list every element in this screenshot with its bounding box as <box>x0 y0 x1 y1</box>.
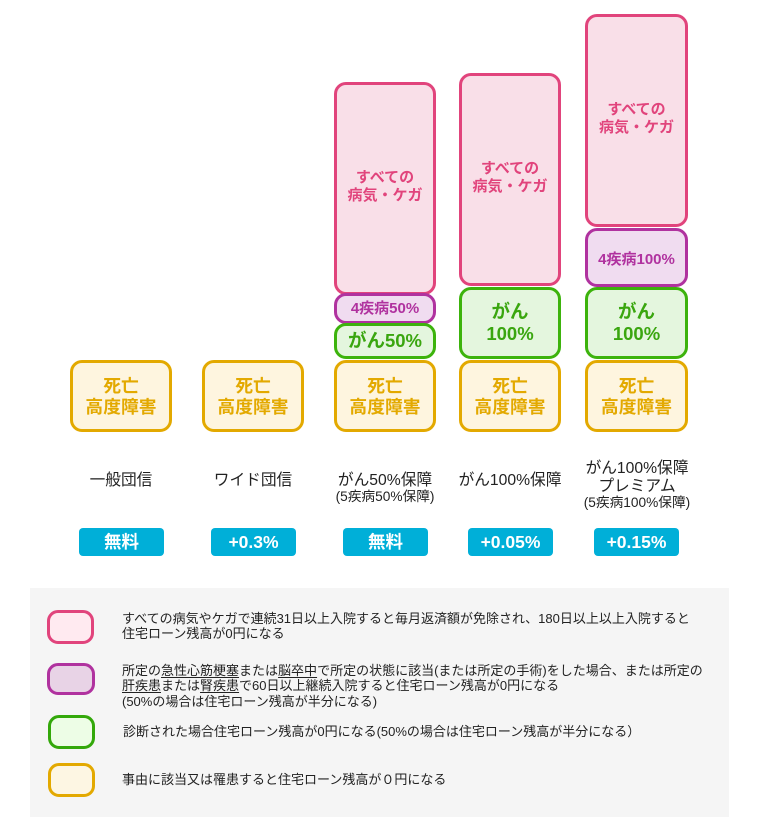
green box: 100% <box>486 323 534 344</box>
yellow box <box>585 360 688 432</box>
green box: 100% <box>613 323 660 344</box>
plan name: がん100%保障プレミアム: (5疾病100%保障) <box>584 495 690 510</box>
price badge: +0.15%: +0.15% <box>607 532 666 552</box>
plan name: がん100%保障プレミアム: プレミアム <box>598 478 676 495</box>
price badge: 無料 <box>79 528 164 556</box>
yellow box <box>459 360 561 432</box>
plan name: 一般団信: 一般団信 <box>90 472 152 489</box>
legend background <box>30 588 729 817</box>
purple box: 4疾病50% <box>351 300 419 317</box>
pink box: 病気・ケガ <box>347 186 422 204</box>
price badge: 無料: 無料 <box>368 532 403 552</box>
price badge: +0.3% <box>211 528 296 556</box>
column: がん100%保障 stack <box>459 73 561 432</box>
yellow box: 死亡 <box>367 376 403 396</box>
column: がん100%保障プレミアム stack <box>585 14 688 432</box>
plan name: がん50%保障 <box>336 471 434 504</box>
green box: がん50% <box>348 330 422 351</box>
column: ワイド団信 death box: 死亡 <box>235 376 271 396</box>
legend text: pink <box>122 611 690 641</box>
pink box <box>459 73 561 286</box>
price badge: +0.05%: +0.05% <box>481 532 540 552</box>
legend text: purple: 肝疾患または腎疾患で60日以上継続入院すると住宅ローン残高が0円になる <box>122 678 559 693</box>
price badge: +0.05% <box>468 528 553 556</box>
yellow box: 高度障害 <box>601 397 672 417</box>
column: がん50%保障 stack <box>334 82 436 432</box>
column: 一般団信 death box: 高度障害 <box>85 397 157 417</box>
pink box: 病気・ケガ <box>472 178 548 194</box>
purple box: 4疾病100% <box>598 250 675 268</box>
green box <box>459 287 561 359</box>
pink box <box>585 14 688 227</box>
price badge: +0.3%: +0.3% <box>228 532 279 552</box>
column: 一般団信 death box: 死亡 <box>103 376 139 396</box>
legend text: yellow: 事由に該当又は罹患すると住宅ローン残高が０円になる <box>122 772 446 787</box>
column: 一般団信 death box <box>70 360 172 432</box>
pink box: すべての <box>356 168 414 186</box>
purple box <box>334 293 436 324</box>
pink box: すべての <box>481 160 539 176</box>
legend text: purple: 所定の急性心筋梗塞または脳卒中で所定の状態に該当(または所定の手術)をした場合、または所定の <box>122 663 703 678</box>
yellow box <box>334 360 436 432</box>
column: ワイド団信 death box <box>202 360 304 432</box>
legend text: green: 診断された場合住宅ローン残高が0円になる(50%の場合は住宅ローン残高が半分になる） <box>123 724 640 739</box>
price badge: 無料 <box>343 528 428 556</box>
yellow box: 高度障害 <box>349 397 421 417</box>
legend text: purple <box>122 663 703 709</box>
green box: がん <box>618 301 655 322</box>
column: ワイド団信 death box: 高度障害 <box>217 397 289 417</box>
legend swatch: purple <box>47 663 95 695</box>
plan name: がん100%保障: がん100%保障 <box>459 472 561 489</box>
pink box <box>334 82 436 295</box>
legend swatch: pink <box>47 610 94 644</box>
price badge: 無料: 無料 <box>104 532 139 552</box>
yellow box: 死亡 <box>619 376 654 396</box>
legend text: purple: (50%の場合は住宅ローン残高が半分になる) <box>122 694 377 709</box>
legend swatch: green <box>48 715 95 749</box>
yellow box: 高度障害 <box>474 397 546 417</box>
legend text: pink: すべての病気やケガで連続31日以上入院すると毎月返済額が免除され、180日以上以上入院すると <box>122 611 690 626</box>
plan name: がん50%保障: (5疾病50%保障) <box>336 489 434 504</box>
price badge: +0.15% <box>594 528 679 556</box>
pink box: すべての <box>607 100 666 118</box>
green box <box>585 287 688 359</box>
legend text: pink: 住宅ローン残高が0円になる <box>122 626 285 641</box>
plan name: がん100%保障プレミアム <box>584 459 690 510</box>
purple box <box>585 228 688 287</box>
plan name: がん100%保障プレミアム: がん100%保障 <box>586 460 688 477</box>
yellow box: 死亡 <box>492 376 528 396</box>
plan name: がん50%保障: がん50%保障 <box>338 472 432 489</box>
green box <box>334 323 436 359</box>
pink box: 病気・ケガ <box>599 118 674 136</box>
plan name: ワイド団信: ワイド団信 <box>214 472 292 489</box>
legend swatch: yellow <box>48 763 95 797</box>
green box: がん <box>491 301 528 322</box>
